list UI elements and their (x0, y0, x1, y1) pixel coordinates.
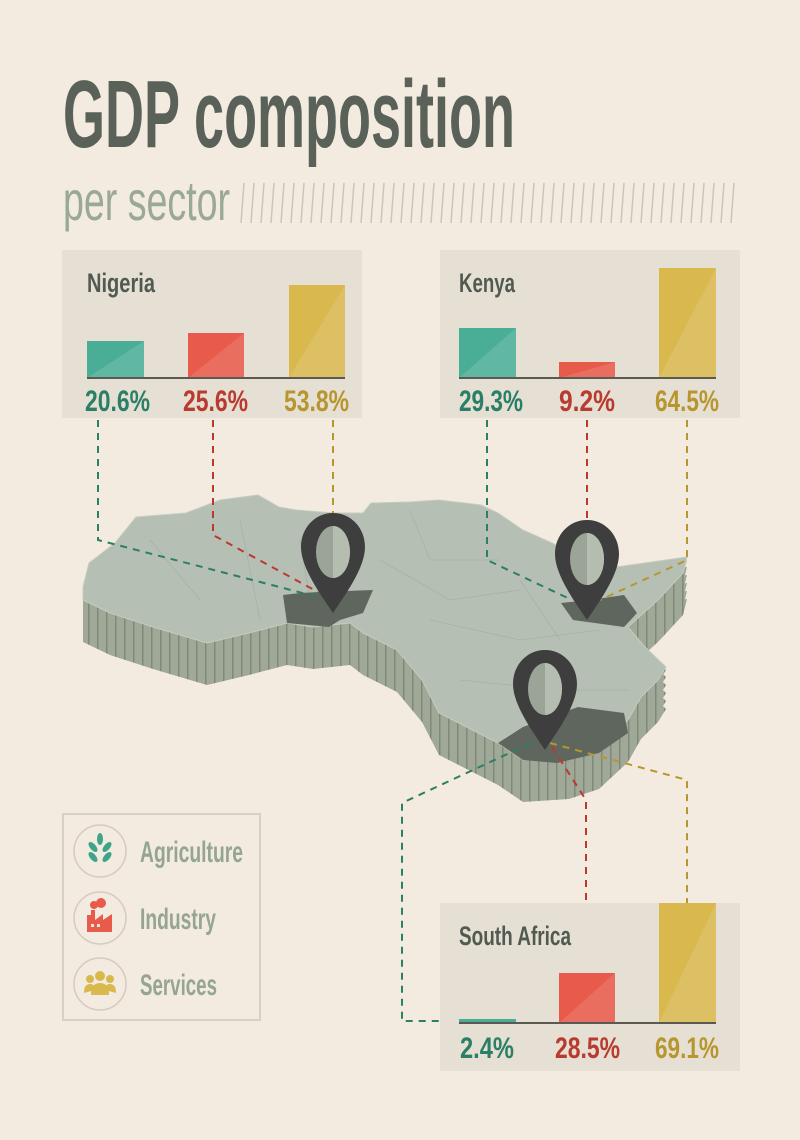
panel: Kenya: 29.3% (459, 385, 523, 418)
dashed connectors: South Africa (402, 743, 687, 1021)
pin: Kenya (555, 520, 619, 620)
panel: South Africa: 2.4% (460, 1032, 514, 1065)
panel: Kenya (440, 250, 740, 418)
label: Agriculture: Agriculture (140, 836, 243, 869)
panel: Nigeria: 20.6% (85, 385, 150, 418)
heading: Nigeria: Nigeria (87, 268, 156, 298)
panel: Nigeria: 53.8% (284, 385, 349, 418)
icon: agriculture (74, 825, 126, 877)
highlight: South Africa (498, 707, 628, 763)
subtitle: per sector (63, 169, 230, 232)
panel: South Africa (440, 903, 740, 1071)
panel: Nigeria: 25.6% (183, 385, 248, 418)
label: Services: Services (140, 969, 217, 1002)
map: Africa (83, 495, 687, 802)
panel: Kenya: 9.2% (559, 385, 615, 418)
pin: South Africa (513, 650, 577, 750)
pin: Nigeria (301, 513, 365, 613)
icon: industry (74, 892, 126, 944)
panel: Kenya: 64.5% (655, 385, 719, 418)
panel: South Africa: 28.5% (555, 1032, 620, 1065)
dashed connectors: Nigeria (98, 420, 333, 597)
panel: South Africa: 69.1% (655, 1032, 719, 1065)
heading: Kenya: Kenya (459, 268, 516, 298)
dashed connectors: Kenya (487, 420, 687, 600)
legend (63, 814, 260, 1020)
panel: Nigeria (62, 250, 362, 418)
icon: services (74, 958, 126, 1010)
highlight: Nigeria (283, 590, 373, 627)
label: Industry: Industry (140, 903, 216, 936)
highlight: Kenya (561, 595, 637, 627)
heading: South Africa: South Africa (459, 921, 572, 951)
